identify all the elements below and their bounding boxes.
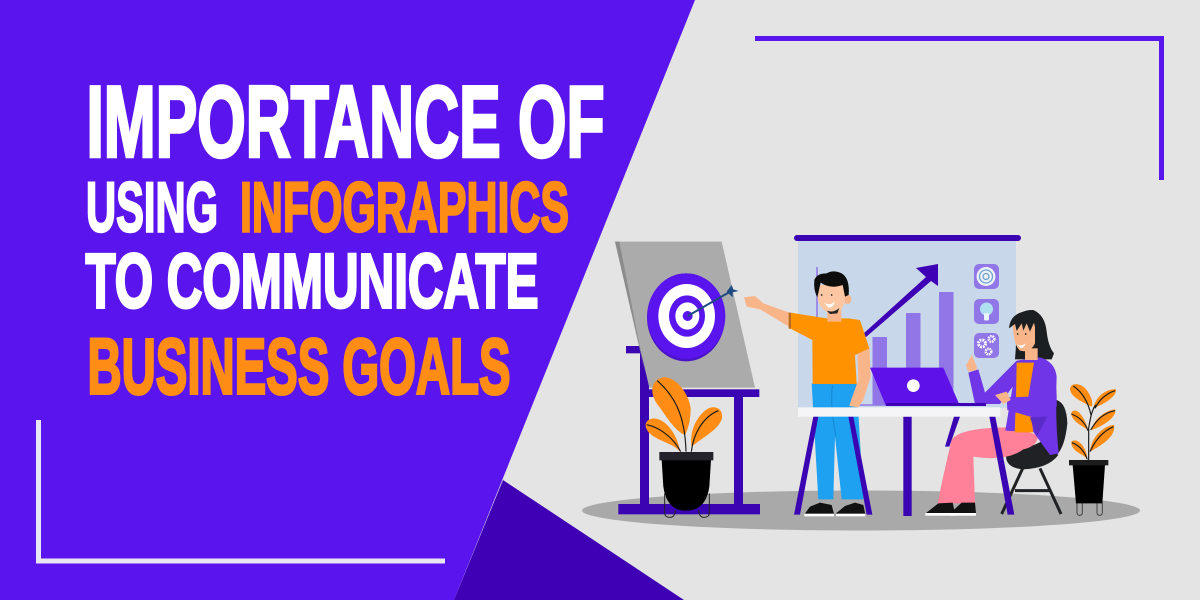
stem and leaves [1070, 384, 1116, 460]
laptop [870, 368, 986, 406]
ground shadow [582, 490, 1140, 530]
title line 4: BUSINESS GOALS [88, 322, 510, 410]
title line 2: USING [86, 168, 218, 247]
woman's shoes [926, 503, 955, 513]
woman's front sleeve [1007, 363, 1057, 417]
whiteboard with chart [794, 235, 1021, 408]
title line 3: TO COMMUNICATE [86, 238, 538, 324]
icon: light bulb [974, 299, 999, 324]
chair [1002, 400, 1067, 514]
chart axes [817, 267, 970, 405]
dark purple triangle [454, 480, 684, 600]
bottom-left corner bracket [38, 420, 445, 561]
whiteboard top bar [794, 235, 1021, 241]
title line 1: IMPORTANCE OF [86, 66, 604, 178]
man's shirt [790, 313, 869, 384]
top-right corner bracket [755, 38, 1162, 180]
woman's hands [995, 392, 1011, 404]
woman's head [1009, 312, 1043, 360]
woman and chair [925, 310, 1067, 516]
title line 2 [86, 168, 569, 247]
pot [662, 460, 711, 511]
icon: gears [974, 333, 999, 358]
title line 2: INFOGRAPHICS [240, 168, 569, 247]
easel and target board [615, 242, 760, 517]
easel frame [618, 344, 760, 514]
title [86, 66, 604, 411]
desk legs [794, 417, 1014, 516]
icon: target [974, 264, 999, 289]
panel: purple background [0, 0, 695, 600]
leaves [652, 377, 691, 435]
right potted plant [1069, 384, 1116, 515]
woman's jacket [968, 357, 1059, 455]
pot legs [1077, 503, 1102, 515]
board [615, 242, 755, 388]
desk top [798, 407, 1000, 417]
target [647, 273, 725, 361]
dart [688, 285, 739, 316]
woman's legs [938, 427, 1038, 503]
pot [1073, 465, 1105, 503]
man [744, 271, 871, 516]
potted plant [646, 377, 722, 517]
man's head [814, 271, 851, 322]
woman's back hair [1015, 310, 1054, 359]
man's arm [744, 296, 793, 328]
woman's top [1015, 363, 1034, 432]
man's shoes [805, 503, 834, 514]
man's legs [812, 383, 863, 499]
growth arrow [863, 264, 938, 337]
desk with laptop [794, 368, 1014, 516]
chart bars [872, 292, 954, 405]
pot legs [665, 493, 709, 517]
